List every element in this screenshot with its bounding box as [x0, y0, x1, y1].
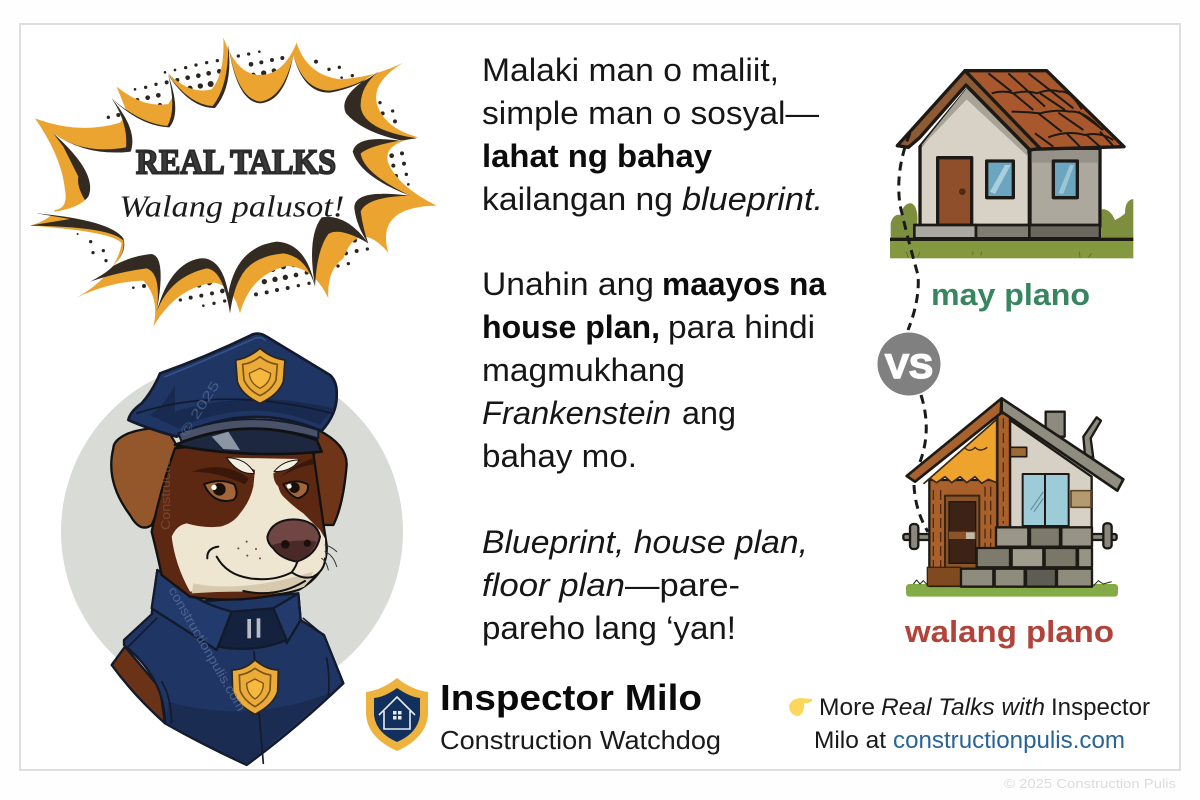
- mouth: [207, 547, 325, 593]
- brows: [227, 458, 254, 473]
- callout: more real talks: Inspector: [1051, 694, 1150, 721]
- side wall: [1030, 148, 1100, 227]
- collar: [152, 570, 232, 650]
- bushes: [891, 203, 917, 238]
- heading: walang plano: walang plano: [904, 614, 1114, 649]
- body text: paragraph 2: bahay mo.: [482, 438, 637, 474]
- body text: paragraph 3: pareho lang ‘yan!: [482, 610, 736, 646]
- roof wood: [907, 398, 1002, 482]
- foundation: [914, 225, 976, 238]
- left ear: [111, 428, 178, 528]
- main roof: [965, 71, 1124, 149]
- icon: bad house: [903, 398, 1123, 597]
- gable roof: [897, 71, 1040, 150]
- body text: paragraph 1: [482, 52, 823, 217]
- dark shadow: [30, 45, 417, 313]
- head: [152, 444, 327, 600]
- body text: paragraph 1: simple man o sosyal—: [482, 95, 819, 131]
- front wall: [920, 90, 1029, 227]
- body text: paragraph 1: Malaki man o maliit,: [482, 52, 779, 88]
- stone blocks: [961, 527, 1092, 587]
- door: [945, 496, 979, 586]
- cap band: [178, 419, 318, 442]
- tagline: Walang palusot: Walang palusot!: [119, 190, 344, 224]
- body text: paragraph 1: lahat ng bahay: [482, 138, 712, 174]
- roof gray: [1002, 398, 1123, 491]
- watermark: construction site: constructionpulis.com: [165, 584, 249, 714]
- wooden base: [927, 567, 961, 586]
- nose: [267, 519, 320, 562]
- body text: paragraph 2: Unahin ang: [482, 266, 654, 302]
- whiskers: [322, 545, 337, 570]
- arms: [112, 647, 165, 723]
- right ear: [313, 430, 347, 525]
- body text: paragraph 2: magmukhang: [482, 352, 685, 388]
- icon: good house: [890, 71, 1133, 258]
- arrow: dashed connector: [899, 133, 928, 532]
- cream face: [172, 458, 326, 593]
- body text: paragraph 1: kailangan ng: [482, 181, 673, 217]
- door: [938, 158, 972, 225]
- heading: REAL TALKS: REAL TALKS: [136, 142, 336, 181]
- body text: paragraph 2: house plan,: [482, 309, 660, 345]
- visor: [175, 429, 322, 454]
- wood wall: [929, 480, 998, 586]
- mascot: Inspector Milo dog: [61, 334, 403, 765]
- ground: [890, 239, 1133, 258]
- callout: more real talks: Real Talks with: [881, 694, 1045, 721]
- body text: paragraph 3: [482, 524, 808, 646]
- heading: Inspector Milo: Inspector Milo: [440, 677, 702, 718]
- body text: paragraph 2: Frankenstein: [482, 395, 671, 431]
- uniform body: [124, 570, 343, 765]
- body text: paragraph 3: Blueprint, house plan,: [482, 524, 808, 560]
- callout: more real talks: Milo at: [814, 727, 886, 754]
- halftone dots: [68, 50, 410, 307]
- windows: [987, 161, 1013, 198]
- icon: shield logo: [366, 678, 428, 751]
- watermark: construction site: © 2025: [177, 378, 222, 439]
- cap badge: [236, 348, 285, 403]
- callout: more real talks: More: [819, 694, 875, 721]
- orange burst: [30, 37, 437, 327]
- plaster wall: [1010, 420, 1092, 530]
- icon: VS badge: [878, 332, 940, 396]
- thatch: [924, 419, 997, 483]
- watermark: construction site: Construction: [158, 450, 173, 530]
- body text: paragraph 3: —pare-: [625, 567, 740, 603]
- body text: paragraph 2: maayos na: [662, 266, 826, 302]
- gray circle: [61, 361, 403, 703]
- body text: paragraph 2: ang: [682, 395, 736, 431]
- chest badge: [232, 660, 278, 714]
- comic burst: Real Talks: [30, 37, 437, 327]
- wood post: [997, 413, 1010, 528]
- icon: VS badge: VS: [885, 348, 933, 386]
- body text: paragraph 1: blueprint.: [682, 181, 823, 217]
- body text: paragraph 3: floor plan: [482, 567, 625, 603]
- cap: [128, 334, 337, 437]
- subheading: Construction Watchdog: Construction Watchdog: [440, 725, 721, 755]
- ground: [906, 584, 1118, 597]
- callout: more real talks: [814, 694, 1150, 754]
- icon: pointing hand: [789, 698, 812, 716]
- watermark: construction site: [158, 378, 249, 714]
- barbells: [903, 523, 1117, 549]
- heading: may plano: may plano: [931, 277, 1090, 312]
- chimney: [1046, 412, 1065, 437]
- eyes: [204, 481, 237, 501]
- white interior: [37, 45, 410, 312]
- window: [1023, 474, 1069, 526]
- callout: more real talks: constructionpulis.com: [893, 727, 1125, 754]
- copyright: © 2025 Construction Pulis: [1004, 776, 1177, 791]
- body text: paragraph 2: para hindi: [668, 309, 815, 345]
- body text: paragraph 2: [482, 266, 826, 474]
